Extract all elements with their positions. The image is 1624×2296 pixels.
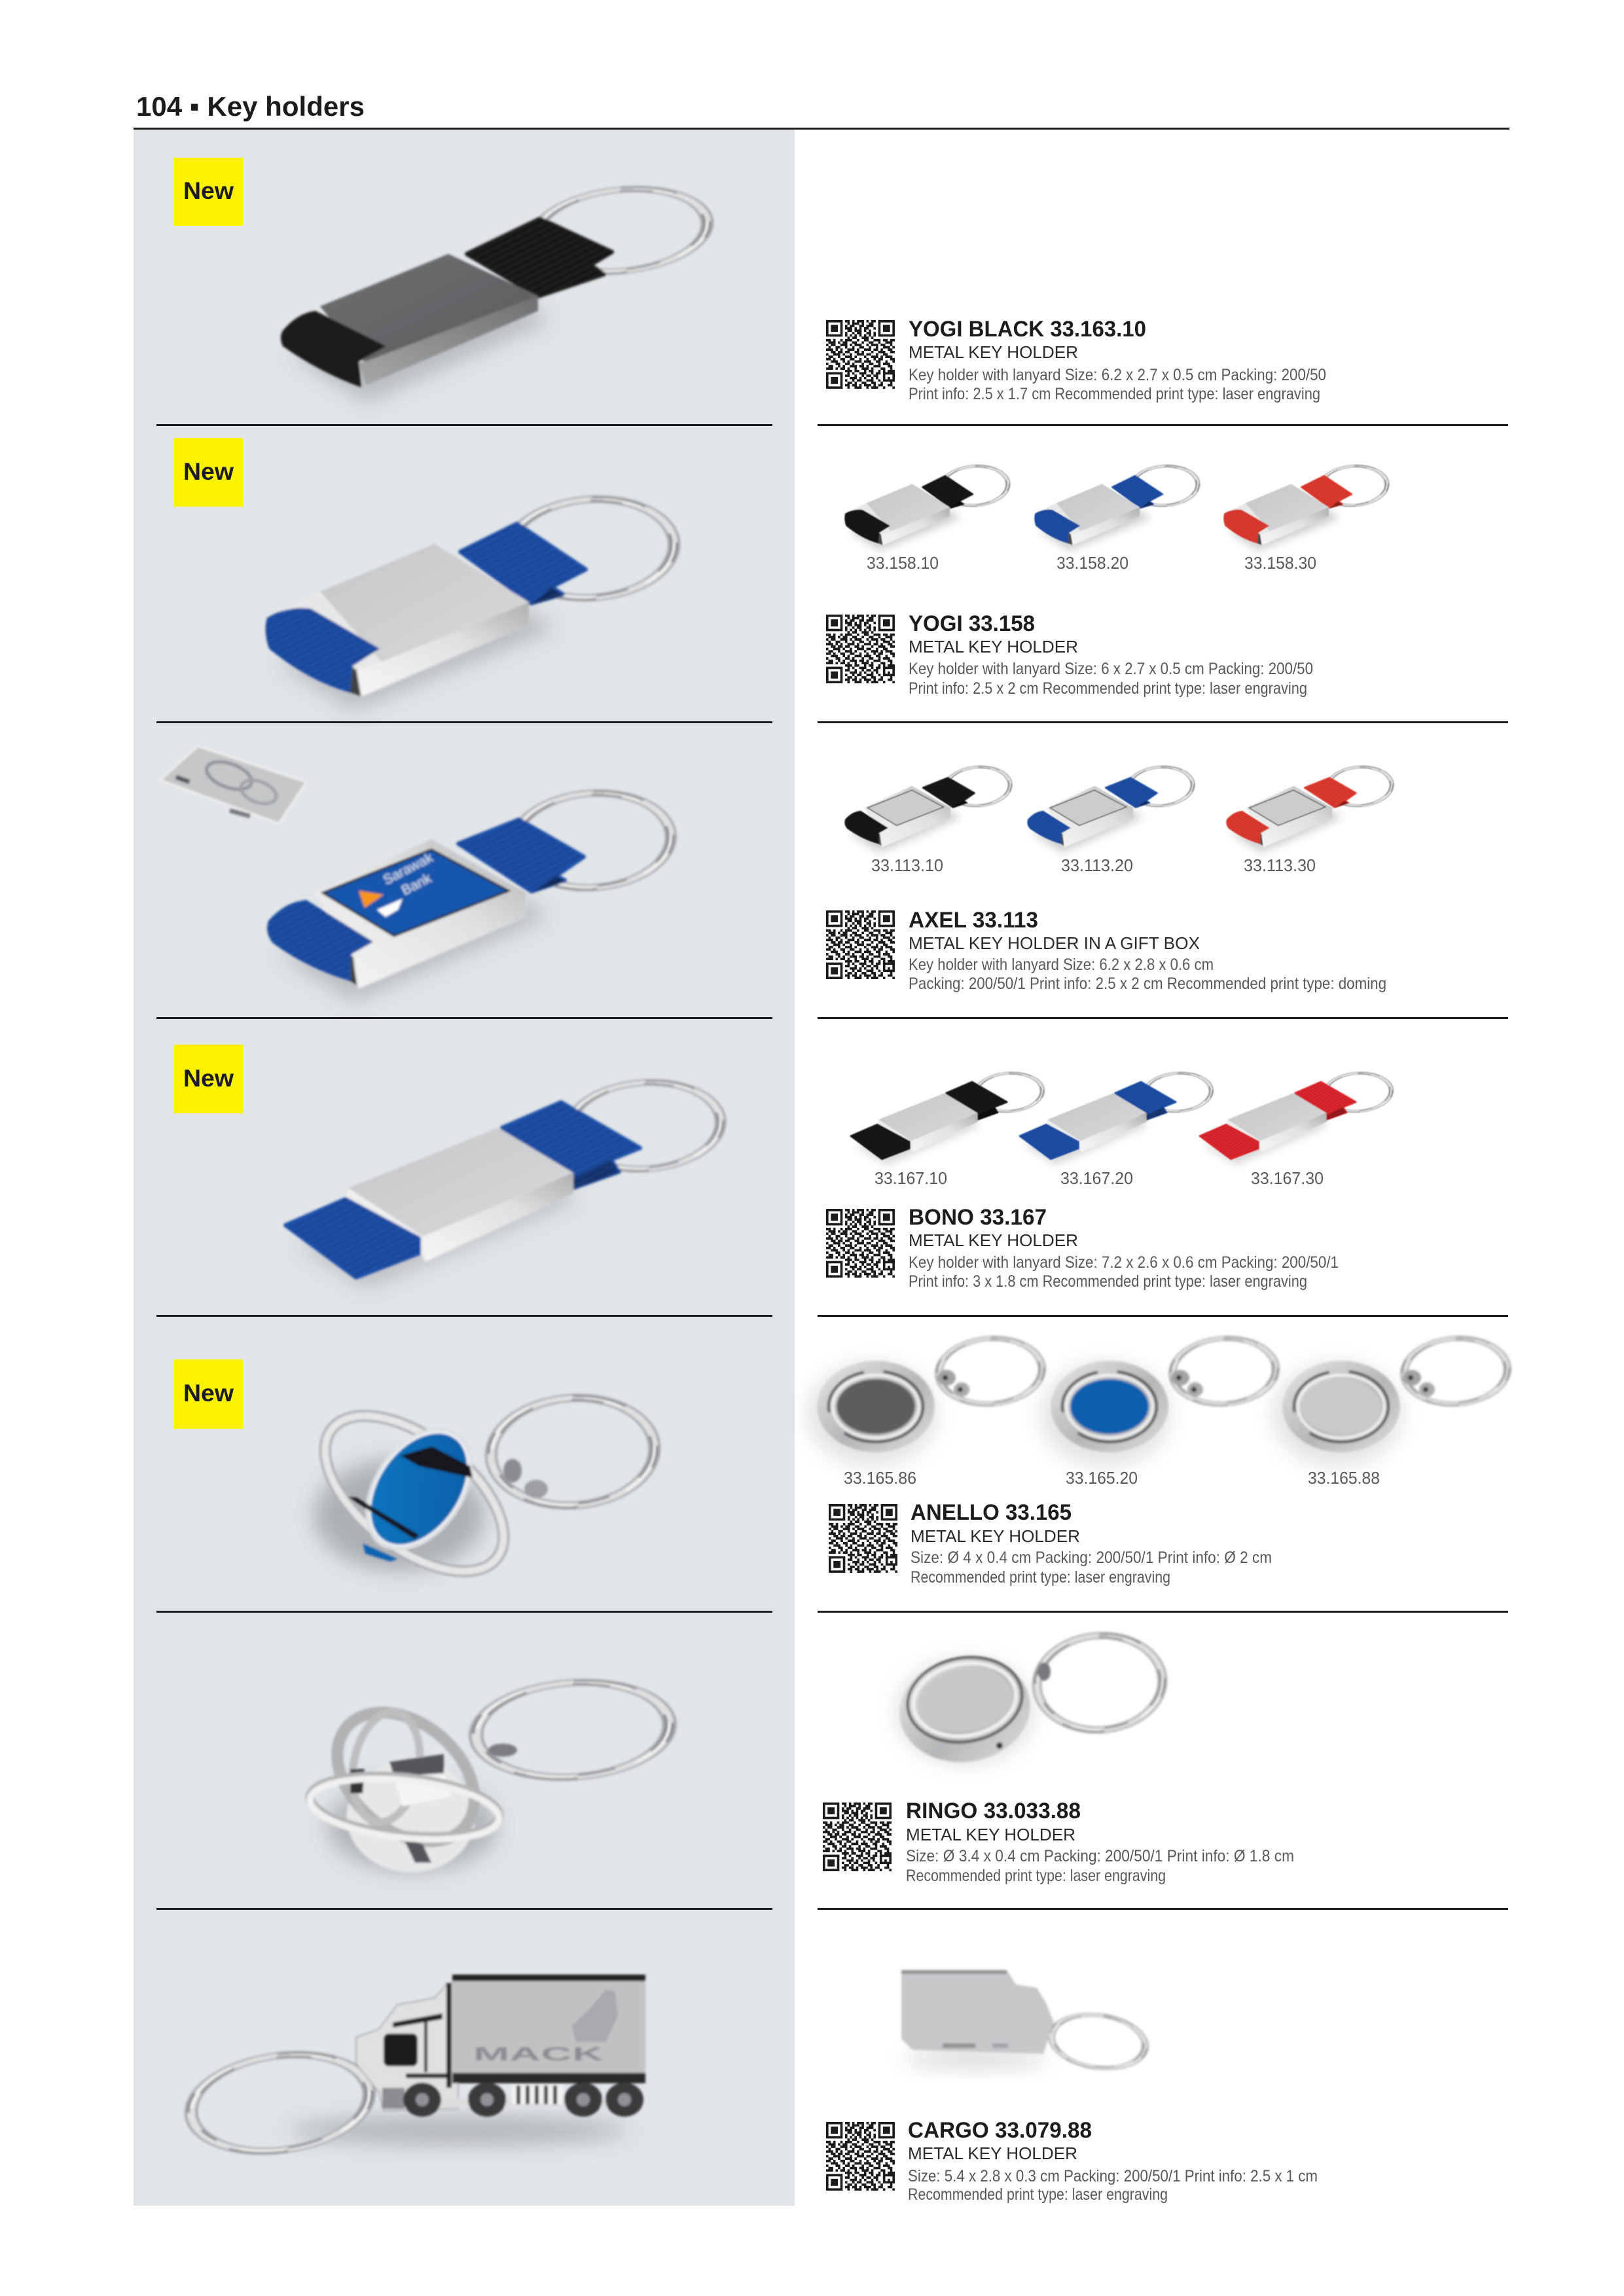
- name: YOGI BLACK 33.163.10: [909, 317, 1146, 342]
- spec line 2: Packing: 200/50/1 Print info: 2.5 x 2 cm Recommended print type: doming: [909, 975, 1386, 993]
- subtitle: METAL KEY HOLDER: [909, 637, 1078, 656]
- product photo: truck key holder: MACK: [473, 2044, 604, 2065]
- badge: new 2: New: [183, 458, 234, 485]
- spec line 2: Recommended print type: laser engraving: [906, 1867, 1166, 1885]
- text block: ringo: [823, 1799, 1294, 1885]
- product photo: gyro blue: [298, 1386, 660, 1602]
- thumb 33.167.20: [1020, 1070, 1214, 1164]
- panel: grey photo column: [134, 130, 795, 2206]
- text block: anello: [829, 1500, 1272, 1587]
- text block: yogi: [826, 611, 1313, 698]
- badge: new 1: New: [183, 177, 234, 204]
- product photo: yogi blue: [266, 492, 680, 710]
- qr code: [823, 1803, 892, 1871]
- badge: new 3: New: [183, 1065, 234, 1092]
- thumb 33.158.10: [844, 463, 1011, 550]
- badge: new 4: [174, 1359, 243, 1429]
- spec line 2: Recommended print type: laser engraving: [911, 1568, 1170, 1587]
- variants: bono: [851, 1070, 1394, 1188]
- spec line 2: Print info: 2.5 x 1.7 cm Recommended print type: laser engraving: [909, 385, 1320, 403]
- thumb 33.113.20: [1027, 764, 1195, 852]
- code 10: 33.158.10: [867, 553, 939, 573]
- subtitle: METAL KEY HOLDER: [908, 2144, 1077, 2163]
- code 88: 33.165.88: [1308, 1468, 1380, 1488]
- product photo: truck key holder: [182, 1975, 645, 2164]
- product photo: bono: [285, 1076, 726, 1289]
- thumb 33.165.20: [1041, 1334, 1280, 1465]
- title: 104 ▪ Key holders: [136, 91, 365, 122]
- name: BONO 33.167: [909, 1205, 1047, 1230]
- name: RINGO 33.033.88: [906, 1799, 1081, 1823]
- badge: new 3: [174, 1045, 243, 1113]
- spec line 1: Key holder with lanyard Size: 7.2 x 2.6 x 0.6 cm Packing: 200/50/1: [909, 1253, 1339, 1272]
- code 20: 33.165.20: [1066, 1468, 1138, 1488]
- row dividers: [156, 424, 1508, 1910]
- spec line 2: Recommended print type: laser engraving: [908, 2185, 1168, 2204]
- text block: bono: [826, 1205, 1339, 1291]
- code 20: 33.158.20: [1056, 553, 1128, 573]
- badge: new 1: [174, 158, 243, 226]
- qr code: [826, 2122, 895, 2191]
- thumb 33.113.10: [844, 764, 1013, 852]
- spec line 2: Print info: 3 x 1.8 cm Recommended print type: laser engraving: [909, 1272, 1307, 1291]
- spec line 1: Key holder with lanyard Size: 6 x 2.7 x 0.5 cm Packing: 200/50: [909, 660, 1313, 678]
- text block: axel: [826, 908, 1386, 993]
- product photo: yogi black: [281, 179, 714, 403]
- thumb 33.165.86: [808, 1334, 1046, 1465]
- qr code: [829, 1504, 897, 1573]
- thumb: ringo: [893, 1630, 1168, 1770]
- subtitle: METAL KEY HOLDER IN A GIFT BOX: [909, 933, 1200, 953]
- thumb 33.167.30: [1200, 1070, 1394, 1164]
- code 30: 33.113.30: [1244, 855, 1316, 875]
- spec line 1: Key holder with lanyard Size: 6.2 x 2.8 x 0.6 cm: [909, 956, 1214, 974]
- name: YOGI 33.158: [909, 611, 1035, 636]
- qr code: [826, 1209, 895, 1278]
- spec line 2: Print info: 2.5 x 2 cm Recommended print type: laser engraving: [909, 679, 1307, 698]
- name: CARGO 33.079.88: [908, 2118, 1092, 2143]
- name: ANELLO 33.165: [911, 1500, 1072, 1525]
- text block: yogi black: [826, 317, 1326, 403]
- qr code: [826, 910, 895, 979]
- code 86: 33.165.86: [844, 1468, 916, 1488]
- badge: new 4: New: [183, 1380, 234, 1407]
- product photo: axel gift box: [160, 746, 306, 823]
- thumb 33.113.30: [1226, 764, 1394, 852]
- thumb 33.165.88: [1273, 1334, 1511, 1465]
- spec line 1: Size: Ø 3.4 x 0.4 cm Packing: 200/50/1 Print info: Ø 1.8 cm: [906, 1847, 1294, 1865]
- spec line 1: Size: 5.4 x 2.8 x 0.3 cm Packing: 200/50/1 Print info: 2.5 x 1 cm: [908, 2167, 1318, 2185]
- header rule: [134, 128, 1509, 130]
- code 10: 33.113.10: [871, 855, 943, 875]
- spec line 1: Size: Ø 4 x 0.4 cm Packing: 200/50/1 Print info: Ø 2 cm: [911, 1549, 1272, 1567]
- text block: cargo: [826, 2118, 1318, 2204]
- badge: new 2: [174, 438, 243, 507]
- variants: yogi: [844, 463, 1390, 573]
- qr code: [826, 615, 895, 683]
- spec line 1: Key holder with lanyard Size: 6.2 x 2.7 x 0.5 cm Packing: 200/50: [909, 366, 1326, 384]
- subtitle: METAL KEY HOLDER: [911, 1526, 1080, 1546]
- variants: anello: [808, 1334, 1511, 1488]
- code 20: 33.113.20: [1061, 855, 1133, 875]
- product photo: gyro silver: [307, 1674, 676, 1872]
- subtitle: METAL KEY HOLDER: [909, 1230, 1078, 1250]
- name: AXEL 33.113: [909, 908, 1038, 933]
- code 30: 33.158.30: [1244, 553, 1316, 573]
- product photo: axel key holder: Sarawak: [381, 850, 436, 888]
- subtitle: METAL KEY HOLDER: [909, 342, 1078, 362]
- subtitle: METAL KEY HOLDER: [906, 1825, 1075, 1844]
- code 10: 33.167.10: [875, 1168, 947, 1188]
- thumb 33.158.20: [1034, 463, 1200, 550]
- product photo: axel key holder: [267, 786, 676, 1001]
- product photo: axel key holder: Bank: [399, 870, 434, 898]
- code 20: 33.167.20: [1060, 1168, 1133, 1188]
- thumb 33.167.10: [851, 1070, 1045, 1164]
- qr code: [826, 320, 895, 389]
- thumb 33.158.30: [1223, 463, 1390, 550]
- variants: axel: [844, 764, 1394, 875]
- thumb: cargo: [901, 1970, 1150, 2075]
- code 30: 33.167.30: [1251, 1168, 1324, 1188]
